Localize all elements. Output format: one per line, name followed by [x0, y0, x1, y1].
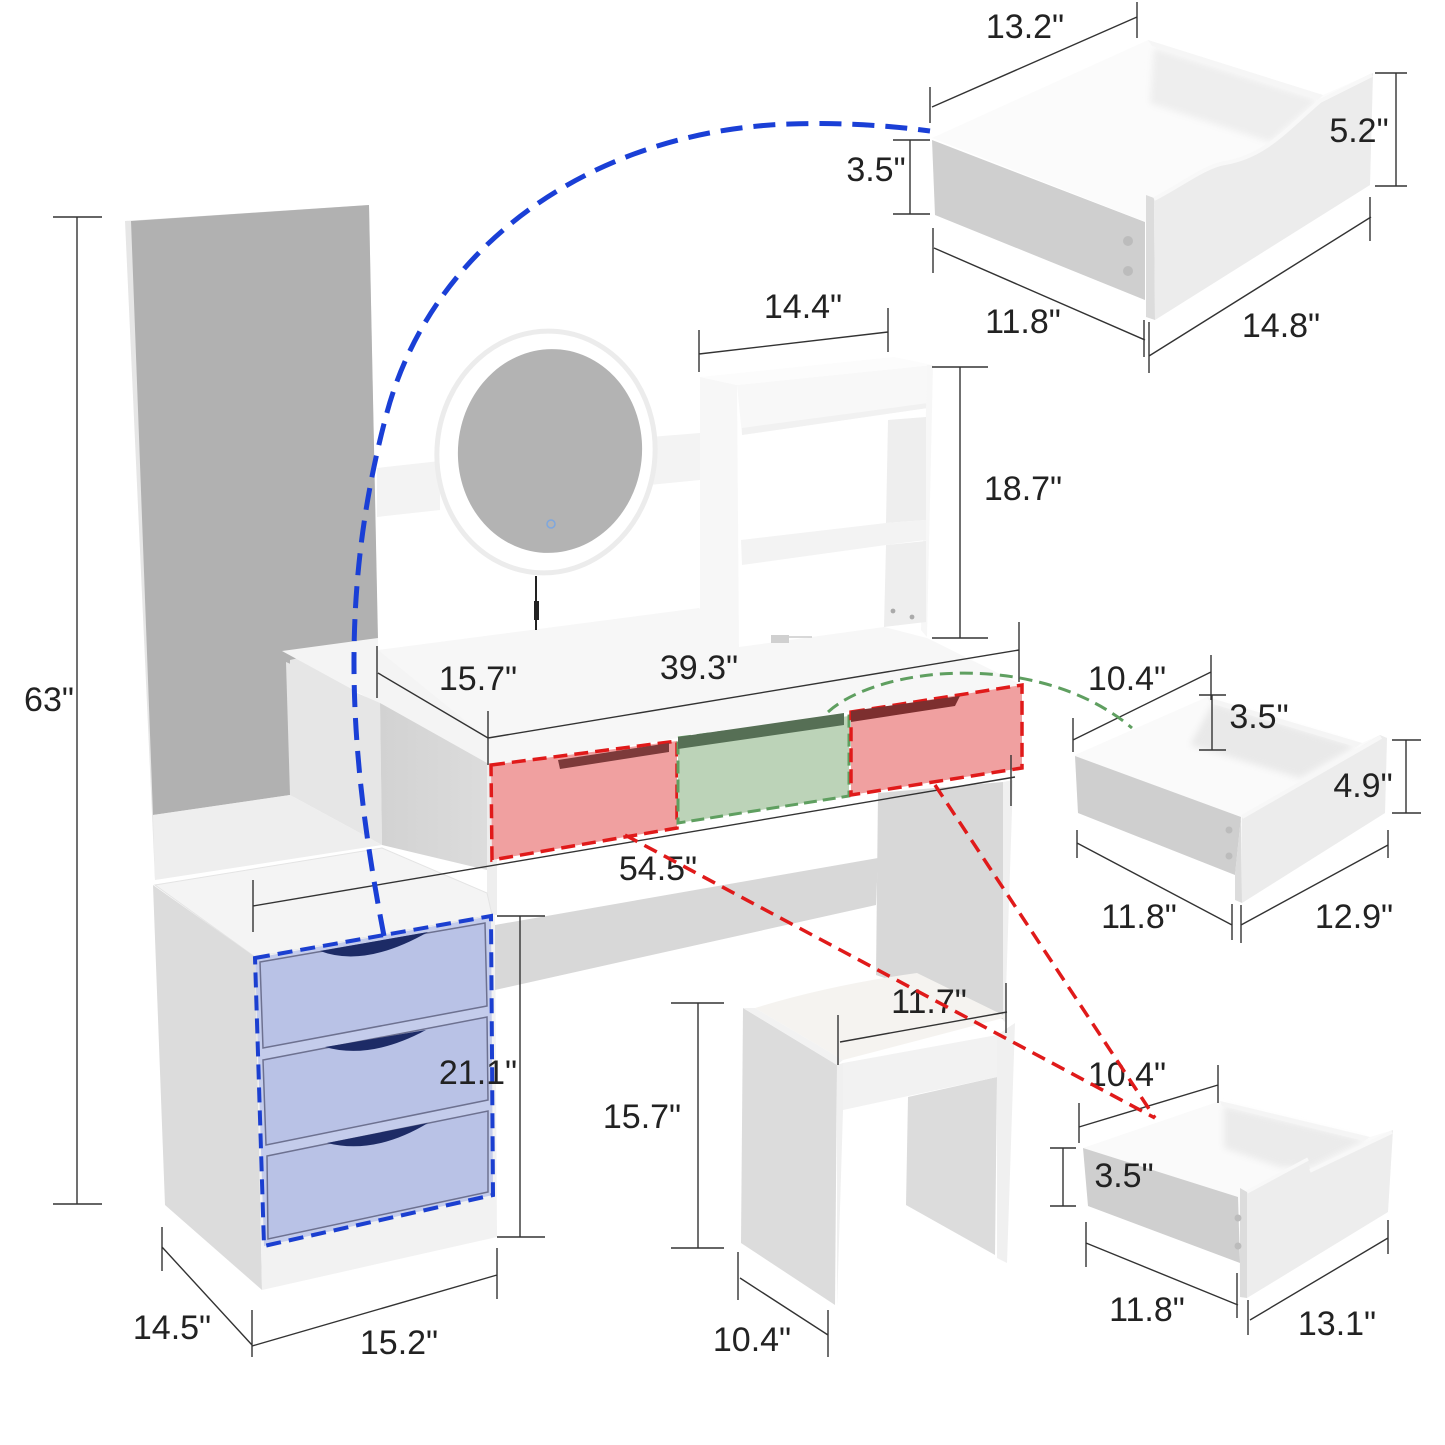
- stool left panel: [741, 1008, 843, 1307]
- dimension: desk depth 15.7: 15.7": [439, 660, 517, 698]
- desk right leg: [876, 780, 1013, 1022]
- dimension: stool depth 10.4: [713, 1252, 828, 1359]
- dimension: middle drawer height 3.5: 3.5": [1229, 698, 1289, 736]
- desk left wing and side panels: [153, 638, 497, 915]
- dimension: shelf width 14.4: 14.4": [764, 288, 842, 326]
- arrow: blue dashed link to top drawer: [354, 124, 930, 936]
- hutch rails behind round mirror: [377, 433, 700, 517]
- full-length mirror: [125, 205, 378, 880]
- arrow: green dashed link to middle drawer: [828, 673, 1132, 728]
- dimension: middle drawer 11.8: 11.8": [1101, 898, 1177, 936]
- blue highlighted drawers: [255, 916, 493, 1246]
- dimension: total width 54.5: [253, 755, 1015, 932]
- dimension: bottom drawer 13.1: 13.1": [1298, 1305, 1376, 1343]
- dimension: shelf width 14.4: [699, 288, 888, 372]
- base cabinet: [153, 848, 497, 1290]
- dimension: cabinet depth 14.5: [133, 1227, 252, 1357]
- dimension: bottom drawer width 10.4: [1079, 1056, 1218, 1143]
- top drawer: [932, 40, 1373, 320]
- dimension: bottom drawer 11.8: 11.8": [1109, 1291, 1185, 1329]
- desk crossbar: [495, 858, 878, 990]
- dimension: middle drawer width 10.4: 10.4": [1088, 660, 1166, 698]
- desk top surface: [378, 608, 1022, 767]
- dimension: bottom drawer 13.1: [1248, 1220, 1388, 1343]
- dimension: full height 63: 63": [24, 681, 74, 719]
- dimension: middle drawer front 4.9: [1333, 740, 1421, 813]
- dimension: desk width 39.3: 39.3": [660, 649, 738, 687]
- dimension: bottom drawer height 3.5: [1050, 1148, 1154, 1206]
- dimension: full height 63: [24, 217, 102, 1204]
- dimension: cabinet width 15.2: [252, 1248, 497, 1362]
- dimension: middle drawer front 4.9: 4.9": [1333, 767, 1393, 805]
- dimension: cabinet height 21.1: 21.1": [439, 1054, 517, 1092]
- dimension: top drawer height 3.5: 3.5": [846, 151, 906, 189]
- dimension: hutch height 18.7: [932, 367, 1062, 638]
- dimension: middle drawer 12.9: [1241, 830, 1393, 943]
- shelf unit: [700, 357, 933, 650]
- round LED mirror: [425, 320, 667, 630]
- dimension: bottom drawer width 10.4: 10.4": [1088, 1056, 1166, 1094]
- red right drawer: [851, 685, 1022, 795]
- dimension: top drawer front 5.2: [1329, 73, 1407, 186]
- dimension: top drawer width 13.2: [930, 2, 1137, 123]
- dimension: middle drawer width 10.4: [1073, 655, 1211, 752]
- stool: [741, 973, 1015, 1307]
- dimension: top drawer 11.8: 11.8": [985, 303, 1061, 341]
- stool seat: [755, 973, 1007, 1060]
- dimension: top drawer height 3.5: [846, 140, 930, 214]
- middle drawer: [1075, 697, 1387, 903]
- dimension: stool width 11.7: 11.7": [891, 983, 967, 1021]
- arrow: red dashed links to bottom drawer: [625, 785, 1155, 1118]
- dimension: top drawer width 13.2: 13.2": [986, 8, 1064, 46]
- dimension: desk width 39.3: [488, 622, 1019, 765]
- dimension: total width 54.5: 54.5": [619, 850, 697, 888]
- dimension: middle drawer 12.9: 12.9": [1315, 898, 1393, 936]
- bottom drawer: [1083, 1101, 1393, 1298]
- dimension: top drawer 11.8: [933, 228, 1145, 357]
- dimension: desk depth 15.7: [377, 646, 517, 738]
- stool rail: [843, 1035, 997, 1110]
- dimension: stool depth 10.4: 10.4": [713, 1321, 791, 1359]
- dimension: stool height 15.7: [603, 1003, 724, 1248]
- dimension: hutch height 18.7: 18.7": [984, 470, 1062, 508]
- dimension: bottom drawer 11.8: [1086, 1222, 1238, 1329]
- dimension: cabinet width 15.2: 15.2": [360, 1324, 438, 1362]
- vanity table: [125, 205, 1022, 1290]
- dimension: top drawer 14.8: 14.8": [1242, 307, 1320, 345]
- dimension: cabinet height 21.1: [439, 916, 545, 1237]
- stool right leg: [906, 1023, 1015, 1263]
- green centre drawer: [678, 713, 849, 823]
- dimension: top drawer 14.8: [1149, 197, 1371, 373]
- dimension: stool width 11.7: [838, 983, 1007, 1065]
- dimension: top drawer front 5.2: 5.2": [1329, 112, 1389, 150]
- dimension: bottom drawer height 3.5: 3.5": [1094, 1157, 1154, 1195]
- red left drawer: [491, 741, 677, 860]
- dimension: stool height 15.7: 15.7": [603, 1098, 681, 1136]
- dimension: cabinet depth 14.5: 14.5": [133, 1309, 211, 1347]
- dimension: middle drawer 11.8: [1077, 830, 1232, 940]
- dimension: middle drawer height 3.5: [1199, 695, 1289, 750]
